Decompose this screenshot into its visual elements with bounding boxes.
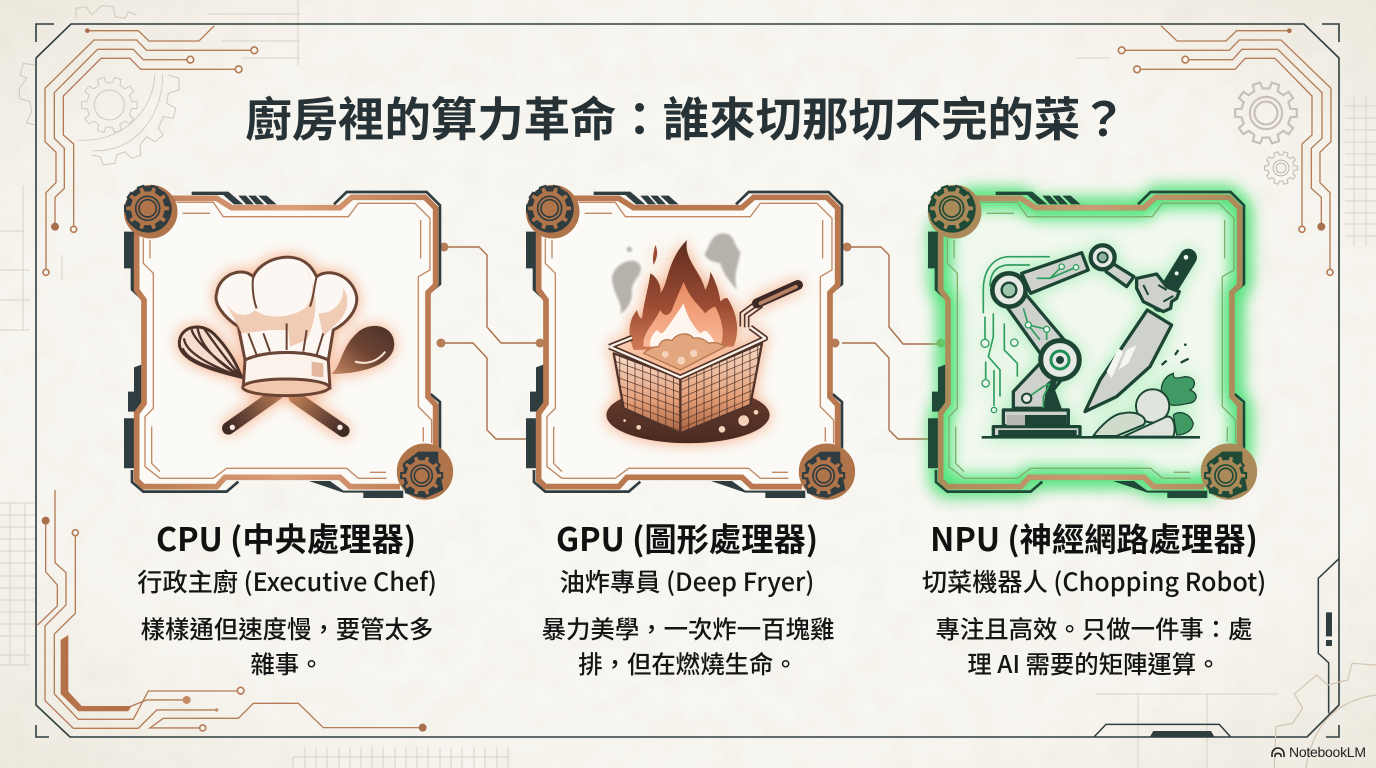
panel text: CPU: 樣樣通但速度慢，要管太多 (141, 611, 433, 646)
panel text: GPU: 暴力美學，一次炸一百塊雞 (542, 611, 834, 646)
panel text: CPU (137, 515, 437, 681)
decorative gear: bottom right (1274, 663, 1376, 768)
panel text: CPU: 行政主廚 (Executive Chef) (137, 563, 437, 599)
icon: chef hat with whisk and spoon (179, 257, 394, 431)
panel text: GPU: 油炸專員 (Deep Fryer) (560, 563, 814, 599)
panel text: NPU: 切菜機器人 (Chopping Robot) (922, 563, 1266, 599)
panel text: GPU (542, 515, 834, 681)
circuit traces: top left (43, 26, 258, 275)
decorative gears: top right (1235, 83, 1297, 184)
panel: NPU (928, 186, 1256, 499)
panel: GPU (526, 186, 854, 499)
panel text: GPU: GPU (圖形處理器) (556, 515, 818, 561)
panel: CPU (124, 186, 452, 499)
panel text: CPU: 雜事。 (250, 646, 324, 681)
panel text: CPU: CPU (中央處理器) (156, 515, 416, 561)
icon: smoke (612, 233, 740, 313)
title: 廚房裡的算力革命：誰來切那切不完的菜？ (245, 83, 1127, 150)
circuit traces: top right (1118, 26, 1333, 275)
panel text: NPU (922, 515, 1266, 681)
panel text: NPU: 理 AI 需要的矩陣運算。 (967, 646, 1221, 681)
circuit traces: bottom left (38, 490, 427, 732)
panel text: NPU: NPU (神經網路處理器) (930, 515, 1258, 561)
icon: flaming fryer basket (606, 240, 798, 443)
icon: robot arm with knife and vegetables (981, 245, 1200, 437)
connector lines between panels (436, 242, 946, 439)
decorative gears: top left (19, 6, 179, 165)
panel text: GPU: 排，但在燃燒生命。 (578, 646, 798, 681)
panel text: NPU: 專注且高效。只做一件事：處 (935, 611, 1253, 646)
NotebookLM watermark: NotebookLM (1289, 744, 1366, 760)
